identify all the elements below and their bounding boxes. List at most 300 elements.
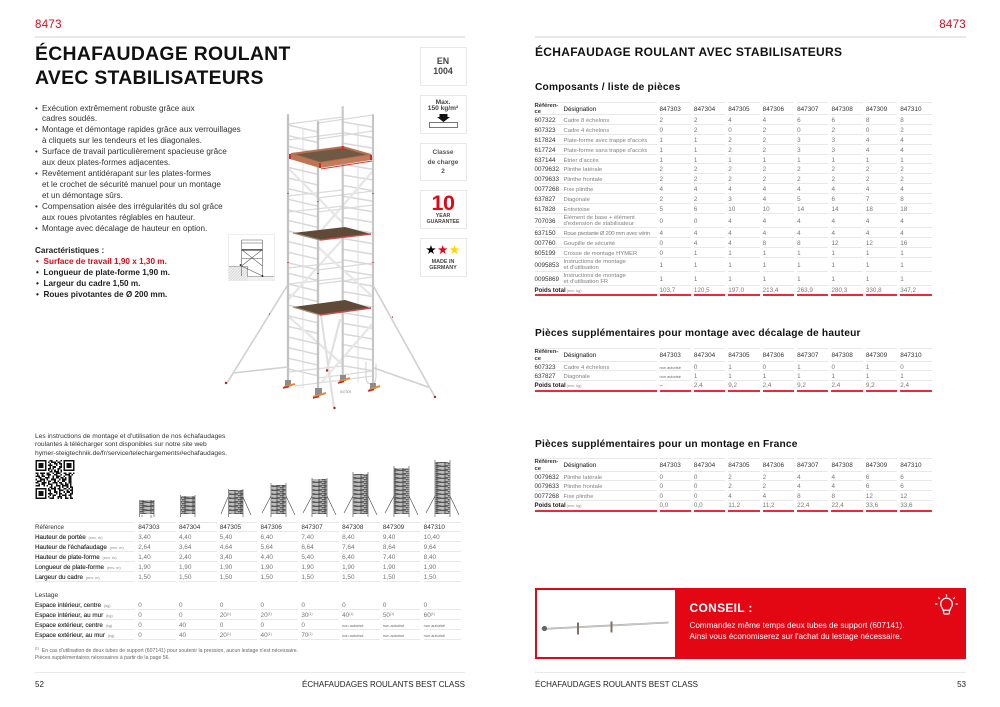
thumbnail 847306	[262, 483, 295, 517]
ballast table: 70(1)	[301, 632, 313, 639]
components total weight row	[534, 287, 932, 296]
components table: 12	[866, 240, 873, 247]
components table: 2	[831, 127, 835, 134]
page number tag left: 8473	[35, 19, 62, 31]
badge: 10 year guarantee: YEAR	[436, 213, 450, 219]
France parts table: 0	[694, 483, 697, 490]
components table: 8	[900, 117, 904, 124]
France parts table: (env. kg)	[567, 503, 582, 508]
height offset parts table: 1	[866, 373, 869, 380]
specification table: Hauteur de plate-forme (env. m)	[35, 554, 116, 561]
badge: max load	[420, 95, 466, 134]
height offset parts table: 1	[866, 364, 869, 370]
height offset parts table: ce	[534, 356, 541, 362]
components table: 7	[866, 196, 869, 203]
heading: France parts: Pièces supplémentaires pour un montage en France	[535, 438, 798, 450]
callout text	[690, 620, 904, 640]
feature bullet list: Compensation aisée des irrégularités du sol grâce	[42, 202, 223, 211]
components table: 2	[900, 166, 904, 173]
components table: 4	[900, 186, 904, 193]
components table: 1	[866, 250, 869, 257]
badge: made in Germany: MADE IN	[432, 259, 454, 265]
callout text: Ainsi vous économiserez sur l'achat du lestage nécessaire.	[690, 632, 902, 640]
ballast table: 0	[301, 622, 305, 629]
height offset parts table: 1	[728, 364, 732, 370]
components table: 3	[728, 196, 732, 203]
components table: 4	[763, 186, 766, 193]
components table: 1	[831, 262, 835, 269]
components table: 4	[763, 196, 766, 203]
specification table: 5,40	[220, 534, 232, 541]
components table: 0079633	[534, 176, 559, 183]
specification table: Longueur de plate-forme (env. m)	[35, 564, 121, 571]
France parts table: 847310	[900, 462, 922, 469]
components table: 2	[763, 166, 766, 173]
ballast table: Espace intérieur, au mur (kg)	[35, 612, 113, 619]
components table: 2	[900, 127, 904, 134]
badge: made in Germany: ★★★	[425, 242, 461, 257]
ballast table: 0	[220, 622, 223, 629]
ballast table: non autorisé	[383, 623, 404, 628]
France parts table: 22,4	[797, 502, 809, 509]
components table: 2	[728, 147, 732, 154]
components table: 0095869	[534, 276, 559, 283]
height offset parts table: 0	[831, 364, 835, 370]
badge: EN 1004	[420, 47, 466, 86]
specification table: 5,40	[301, 554, 314, 561]
components header row: ce	[534, 109, 541, 115]
height offset parts table: 1	[694, 373, 697, 380]
components table: 10	[763, 206, 770, 213]
ballast table: 0	[138, 632, 142, 639]
footnote: Pièces supplémentaires nécessaires à partir de la page 56.	[35, 655, 170, 661]
ballast table: 30(1)	[301, 612, 313, 619]
components table: 607322	[534, 117, 556, 124]
components table: 1	[660, 157, 663, 164]
tip callout	[534, 588, 966, 659]
specification table: Hauteur de portée (env. m)	[35, 534, 102, 541]
thumbnail 847305	[221, 489, 251, 517]
specification table: 1,50	[261, 574, 273, 581]
components table: 1	[797, 157, 801, 164]
France parts table: 0,0	[694, 502, 703, 509]
characteristics list: Largeur du cadre 1,50 m.	[44, 279, 140, 288]
components table: 4	[900, 137, 904, 144]
France parts table: 2	[728, 483, 732, 490]
components header row: 847306	[763, 106, 784, 112]
spec table header: 847304	[179, 524, 200, 531]
components table: 0077268	[534, 186, 559, 193]
badge: made in Germany: GERMANY	[429, 265, 457, 271]
France parts table: 0	[660, 483, 663, 490]
France parts table: 847303	[660, 462, 681, 469]
feature bullet list: cadres soudés.	[42, 114, 97, 123]
feature bullet list: Surface de travail particulièrement spacieuse grâce	[42, 147, 227, 156]
France parts table: 11,2	[728, 502, 740, 509]
ballast table: 0	[138, 602, 142, 609]
components table: Cadre 8 échelons	[564, 118, 609, 124]
components table: 4	[728, 230, 732, 237]
spec table header: 847303	[138, 524, 160, 531]
France parts table: Fixe plinthe	[564, 494, 593, 500]
components total weight row: 213,4	[763, 287, 778, 294]
components table: 3	[831, 147, 835, 154]
height offset parts table: Référen-	[534, 349, 558, 355]
components table: 16	[900, 240, 907, 247]
components table: 2	[728, 166, 732, 173]
footer left	[35, 680, 465, 688]
ballast table: 50(1)	[383, 612, 394, 619]
components table: 617724	[534, 147, 556, 154]
components table: d'extension de stabilisateur	[564, 221, 634, 227]
components table: Goupille de sécurité	[564, 241, 615, 247]
download instructions text: hymer-steigtechnik.de/fr/service/telechargements#echafaudages.	[35, 450, 227, 457]
components header row: 847309	[866, 106, 887, 112]
height offset parts table: 1	[831, 373, 835, 380]
components table: 1	[900, 262, 904, 269]
heading: height offset parts: Pièces supplémentaires pour montage avec décalage de hauteur	[535, 328, 861, 339]
components header row: Référen-	[534, 103, 558, 109]
height offset parts table: 0	[694, 364, 697, 370]
components table: 18	[866, 206, 873, 213]
components table: 2	[660, 166, 663, 173]
ballast table: 20(1)	[220, 632, 231, 639]
page number tag right: 8473	[939, 19, 966, 31]
components table: 4	[763, 230, 766, 237]
components table: 0	[797, 127, 801, 134]
footnote	[35, 646, 298, 661]
support tube photo	[537, 590, 675, 657]
specification table: 3,40	[220, 554, 232, 561]
feature bullet list: Revêtement antidérapant sur les plates-formes	[42, 169, 211, 178]
height offset parts table: 607323	[534, 364, 556, 370]
components table: 1	[866, 262, 869, 269]
components table: 1	[660, 137, 663, 144]
components total weight row: 347,2	[900, 287, 916, 294]
components table: 1	[728, 250, 732, 257]
badge: load class: 2	[441, 168, 445, 175]
components table: 4	[728, 117, 732, 124]
France parts table: 6	[900, 474, 904, 480]
ballast table: 40(1)	[261, 632, 272, 639]
badge: max load: Max.	[436, 98, 450, 106]
France parts table: 0	[694, 493, 697, 500]
height offset parts table: 9,2	[728, 382, 737, 389]
badge: EN 1004: EN	[437, 56, 449, 66]
ballast table: 0	[261, 622, 264, 629]
components table: 1	[866, 276, 869, 283]
components table: 4	[797, 230, 801, 237]
components table: 2	[660, 176, 663, 183]
components table: 4	[866, 137, 869, 144]
specification table: 1,90	[220, 564, 232, 571]
height offset parts table: (env. kg)	[567, 383, 582, 388]
components table: 1	[660, 262, 663, 269]
specification table: 6,64	[301, 544, 314, 551]
components table: 2	[866, 176, 869, 183]
specification table: 1,50	[424, 574, 436, 581]
France parts table: 0	[660, 474, 663, 480]
spec table header: 847305	[220, 524, 241, 531]
France parts table: 4	[797, 474, 801, 480]
ballast table: 0	[424, 602, 427, 609]
components table: Plinthe latérale	[564, 167, 602, 173]
France parts table: 8	[831, 493, 835, 500]
components table: 617828	[534, 206, 556, 213]
components table: 4	[763, 117, 766, 124]
components table: 1	[763, 157, 766, 164]
components table: 4	[900, 147, 904, 154]
specification table: 7,40	[301, 534, 314, 541]
height offset parts table: 0	[900, 364, 904, 370]
ballast table: 40	[179, 622, 186, 629]
callout text: Commandez même temps deux tubes de support (607141).	[690, 620, 904, 630]
specification table: 1,50	[342, 574, 355, 581]
France parts table: 2	[763, 474, 766, 480]
components table: et d'utilisation	[564, 265, 599, 271]
France parts table: 4	[831, 483, 835, 490]
specification table: 1,50	[301, 574, 314, 581]
height offset parts table: 637827	[534, 373, 556, 380]
France parts table: Plinthe frontale	[564, 484, 602, 490]
height offset parts table: 2,4	[763, 382, 771, 389]
height offset parts table: 1	[797, 364, 801, 370]
components table: 1	[866, 157, 869, 164]
specification table: 8,64	[383, 544, 395, 551]
components table: 3	[831, 137, 835, 144]
France parts table: Désignation	[564, 462, 596, 469]
France parts table: Plinthe latérale	[564, 474, 602, 480]
ballast table: non autorisé	[424, 623, 445, 628]
badge: 10 year guarantee: 10	[432, 191, 454, 215]
scaffold size thumbnails	[139, 460, 460, 518]
components header row: 847304	[694, 106, 715, 112]
components total weight row: 263,9	[797, 287, 813, 294]
specification table: 8,40	[342, 534, 355, 541]
components table: 1	[900, 250, 904, 257]
footer left: 52	[35, 680, 44, 688]
components table: 14	[831, 206, 838, 213]
characteristics list: Caractéristiques :	[35, 246, 104, 255]
components header row: 847305	[728, 106, 750, 112]
components table: 1	[831, 276, 835, 283]
height offset parts table: 847306	[763, 352, 784, 359]
components total weight row: 280,3	[831, 287, 847, 294]
ballast table: 0	[261, 602, 264, 609]
components table: 0079632	[534, 166, 559, 173]
height offset parts table: 1	[728, 373, 732, 380]
specification table: 6,40	[342, 554, 355, 561]
ballast table: 0	[138, 612, 142, 619]
feature bullet list: à cliquets sur les tendeurs et les diagonales.	[42, 136, 202, 145]
components total weight row: 197,0	[728, 287, 744, 294]
France parts table: Référen-	[534, 459, 558, 465]
height offset parts table: Cadre 4 échelons	[564, 364, 609, 370]
ballast table: non autorisé	[383, 633, 404, 638]
height offset parts table: non autorisé	[660, 374, 681, 379]
components table: 2	[763, 127, 766, 134]
components table: 14	[797, 206, 804, 213]
components table: 4	[831, 186, 835, 193]
specification table: 1,50	[383, 574, 395, 581]
badge: load class	[420, 142, 466, 181]
components table: 1	[728, 262, 732, 269]
France parts table: ce	[534, 466, 541, 472]
ballast table: non autorisé	[342, 623, 364, 628]
components table: Fixe plinthe	[564, 187, 593, 193]
specification table: Hauteur de l'échafaudage (env. m)	[35, 544, 124, 551]
France parts table: 2	[728, 474, 732, 480]
components table: 4	[660, 186, 663, 193]
components table: 4	[694, 240, 697, 247]
height offset parts table: non autorisé	[660, 364, 681, 370]
components table: 6	[797, 117, 801, 124]
components table: 12	[831, 240, 838, 247]
ballast table: 0	[342, 602, 346, 609]
specification table	[35, 522, 461, 582]
components table: et d'utilisation FR	[564, 279, 608, 285]
specification table: 10,40	[424, 534, 440, 541]
badge: made in Germany	[420, 238, 466, 276]
components table: 2	[831, 166, 835, 173]
middle platform	[293, 227, 371, 240]
components table: Étrier d'accès	[564, 158, 599, 164]
height offset parts table: 1	[900, 373, 904, 380]
height offset parts table: 2,4	[831, 382, 840, 389]
components table: 1	[900, 276, 904, 283]
components table: 0	[728, 127, 732, 134]
components table: 2	[728, 176, 732, 183]
footer left: ÉCHAFAUDAGES ROULANTS BEST CLASS	[302, 680, 465, 688]
height offset parts table: 2,4	[900, 382, 909, 389]
components table: 1	[694, 276, 697, 283]
height offset parts table: 0	[763, 364, 766, 370]
height offset parts table: Poids total	[534, 382, 566, 389]
France parts table: 4	[831, 474, 835, 480]
components table: 0	[660, 127, 663, 134]
inset diagram: height offset assembly	[228, 234, 275, 281]
characteristics list: Roues pivotantes de Ø 200 mm.	[44, 290, 167, 299]
illustration: rolling scaffold with stabilisers	[224, 106, 436, 410]
specification table: 1,90	[383, 564, 395, 571]
thumbnail 847309	[385, 466, 418, 517]
thumbnail 847303	[140, 500, 154, 518]
height offset parts table: 847310	[900, 352, 922, 359]
components table: Diagonale	[564, 197, 590, 203]
feature bullet list: Montage et démontage rapides grâce aux verrouillages	[42, 125, 241, 134]
title	[35, 42, 291, 89]
feature bullet list	[35, 104, 241, 233]
components table: 2	[660, 117, 663, 124]
components table: 1	[797, 250, 801, 257]
components table: 1	[728, 157, 732, 164]
title: AVEC STABILISATEURS	[35, 67, 264, 89]
ballast table: 20(1)	[261, 612, 272, 619]
height offset parts table: 9,2	[797, 382, 806, 389]
components table: Crosse de montage HYMER	[564, 251, 637, 257]
spec table header: 847308	[342, 524, 363, 531]
components table: 617824	[534, 137, 556, 144]
components table: 2	[694, 127, 697, 134]
ballast table: Espace intérieur, centre (kg)	[35, 602, 111, 609]
France parts table: 6	[866, 483, 869, 490]
right page heading: ÉCHAFAUDAGE ROULANT AVEC STABILISATEURS	[535, 45, 842, 59]
components table: 0	[694, 218, 697, 225]
France parts table: 4	[728, 493, 732, 500]
components table: 1	[763, 250, 766, 257]
components table: 4	[866, 218, 869, 225]
components table: 1	[660, 147, 663, 154]
components table: 0	[660, 240, 663, 247]
ballast table: Espace extérieur, au mur (kg)	[35, 632, 114, 639]
spec table header: Référence	[35, 524, 64, 531]
components table: 1	[694, 250, 697, 257]
components table: 4	[831, 230, 835, 237]
spec table header: 847306	[261, 524, 282, 531]
download instructions text: roulantes à télécharger sont disponibles sur notre site web	[35, 441, 207, 448]
France parts table: 0079633	[534, 483, 559, 490]
specification table: 8,40	[424, 554, 436, 561]
characteristics list: Surface de travail 1,90 x 1,30 m.	[44, 257, 167, 266]
components table: 4	[660, 230, 663, 237]
specification table: 4,40	[261, 554, 273, 561]
feature bullet list: Montage avec décalage de hauteur en option.	[42, 224, 207, 233]
components table: 6	[831, 196, 835, 203]
components table: 637150	[534, 230, 556, 237]
ballast table: non autorisé	[342, 633, 364, 638]
components table: 607323	[534, 127, 556, 134]
article number label: 847309	[340, 390, 351, 394]
components table: 1	[694, 147, 697, 154]
badge: 10 year guarantee	[420, 190, 466, 228]
top platform	[290, 146, 372, 169]
ballast table	[35, 602, 461, 640]
components table: 5	[660, 206, 663, 213]
specification table: 1,90	[138, 564, 151, 571]
ballast table: non autorisé	[424, 633, 445, 638]
components table: 2	[831, 176, 835, 183]
components table: 4	[728, 218, 732, 225]
components table: Élément de base + élément	[564, 215, 635, 221]
France parts table: 22,4	[831, 502, 844, 509]
components table	[534, 102, 932, 296]
components table: Roue pivotante Ø 200 mm avec vérin	[564, 231, 650, 237]
specification table: 3,64	[179, 544, 191, 551]
height offset parts table: –	[660, 382, 663, 389]
components table: 8	[763, 240, 766, 247]
components table: 10	[728, 206, 735, 213]
height offset parts table	[534, 348, 932, 392]
components table: 605199	[534, 250, 556, 257]
components table: 1	[797, 276, 801, 283]
components table: 6	[694, 206, 697, 213]
components table: 0	[660, 218, 663, 225]
components table: Plate-forme avec trappe d'accès	[564, 138, 647, 144]
components table: 1	[694, 137, 697, 144]
specification table: 3,40	[138, 534, 151, 541]
France parts table	[534, 458, 932, 512]
characteristics list: Longueur de plate-forme 1,90 m.	[44, 268, 170, 277]
components table: 637827	[534, 196, 556, 203]
components table: 4	[866, 147, 869, 154]
title: ÉCHAFAUDAGE ROULANT	[35, 43, 291, 65]
France parts table: 12	[900, 493, 907, 500]
components header row: 847303	[660, 106, 681, 112]
components table: 2	[763, 147, 766, 154]
height offset parts table: 1	[763, 373, 766, 380]
specification table: 1,50	[179, 574, 191, 581]
components table: 2	[797, 166, 801, 173]
